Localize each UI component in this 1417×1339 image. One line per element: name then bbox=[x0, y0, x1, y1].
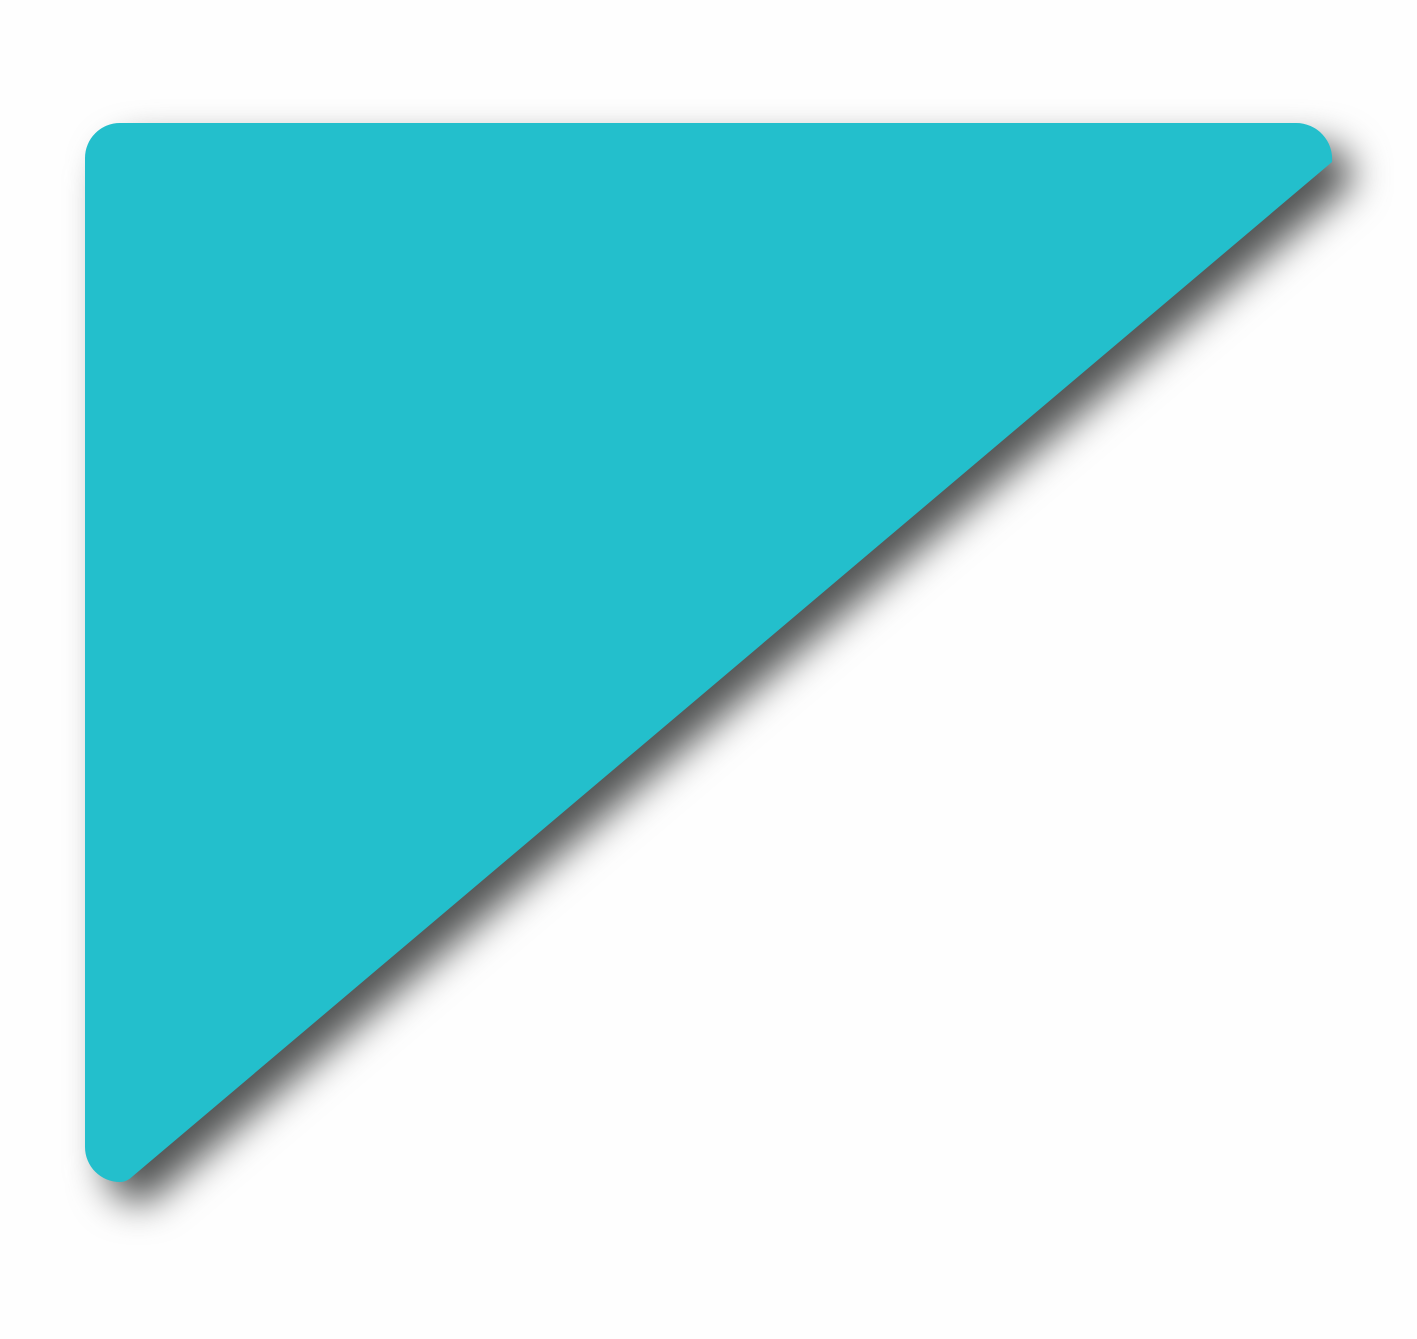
teal triangle bbox=[85, 123, 1332, 1182]
drop shadow bbox=[106, 144, 1353, 1203]
